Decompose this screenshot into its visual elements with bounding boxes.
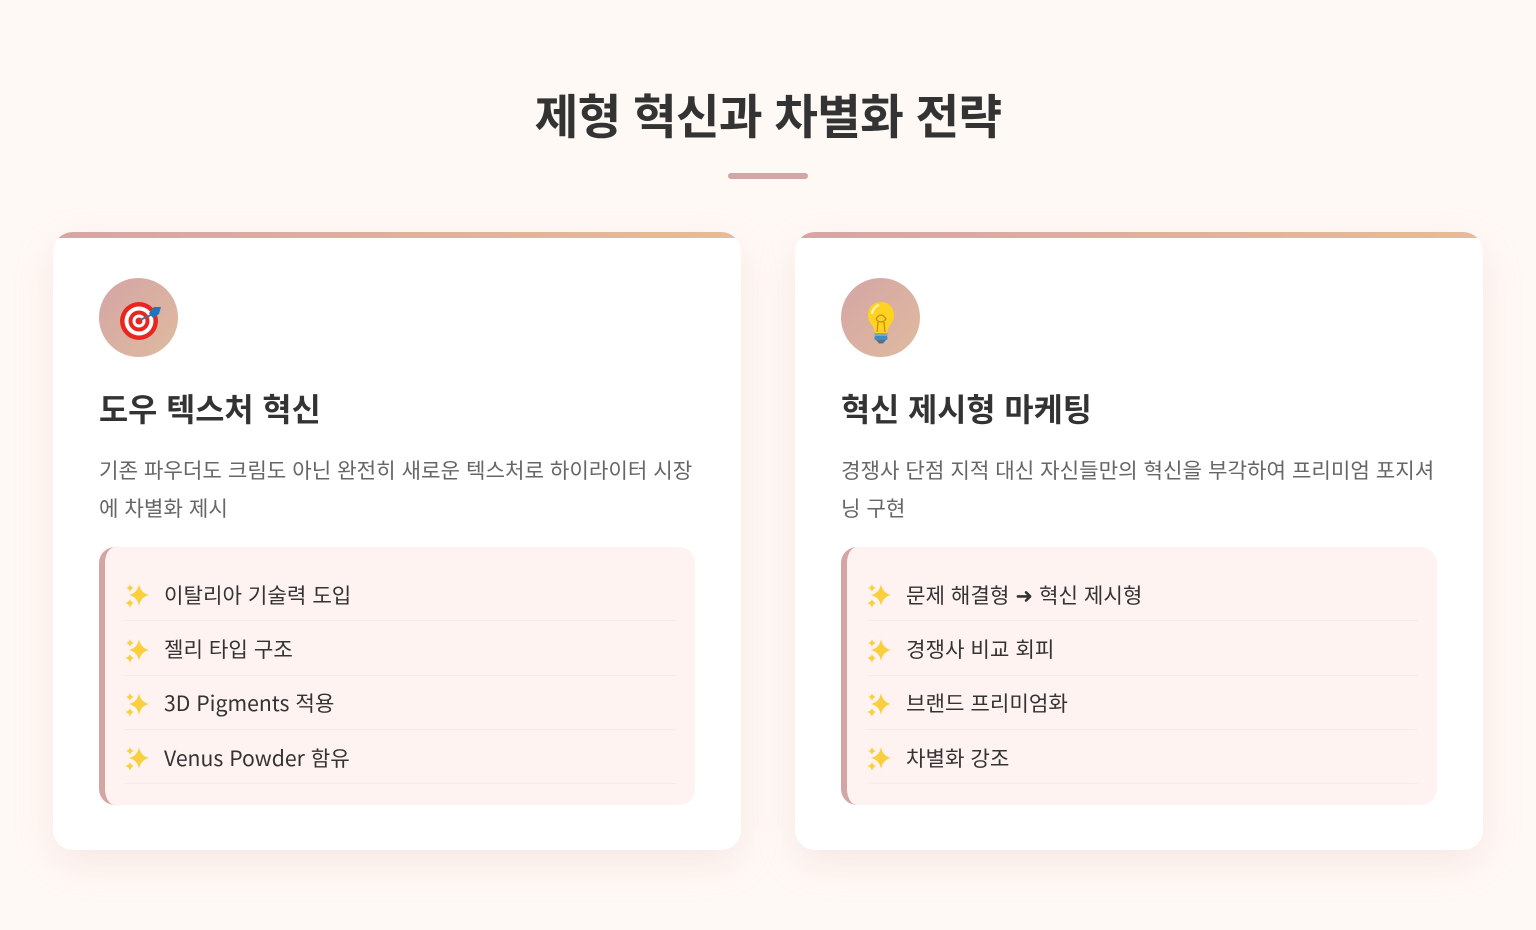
list item: 문제 해결형 ➜ 혁신 제시형 <box>906 579 1142 610</box>
list item: 경쟁사 비교 회피 <box>906 633 1054 664</box>
panel: innovation marketing <box>795 232 1483 850</box>
description <box>841 454 1434 523</box>
list item <box>125 621 676 676</box>
title underline <box>728 173 808 179</box>
description: 경쟁사 단점 지적 대신 자신들만의 혁신을 부각하여 프리미엄 포지셔 <box>841 454 1434 485</box>
icon: light bulb <box>841 278 920 357</box>
description: 에 차별화 제시 <box>99 492 228 523</box>
panel: texture innovation <box>53 232 741 850</box>
list item <box>867 675 1418 730</box>
list item: 젤리 타입 구조 <box>164 633 293 664</box>
heading: 혁신 제시형 마케팅 <box>841 385 1092 431</box>
description: 닝 구현 <box>841 492 905 523</box>
list item <box>125 675 676 730</box>
description: 기존 파우더도 크림도 아닌 완전히 새로운 텍스처로 하이라이터 시장 <box>99 454 692 485</box>
list item: 이탈리아 기술력 도입 <box>164 579 351 610</box>
list item <box>867 729 1418 784</box>
list item: 차별화 강조 <box>906 742 1009 773</box>
list item: 3D Pigments 적용 <box>164 687 334 718</box>
title: 제형 혁신과 차별화 전략 <box>535 79 1001 148</box>
feature list <box>99 547 695 805</box>
list item <box>125 566 676 621</box>
list item <box>867 621 1418 676</box>
feature list <box>841 547 1437 805</box>
list item: Venus Powder 함유 <box>164 742 350 773</box>
description <box>99 454 692 523</box>
list item <box>867 566 1418 621</box>
icon: target <box>99 278 178 357</box>
heading: 도우 텍스처 혁신 <box>99 385 321 431</box>
list item: 브랜드 프리미엄화 <box>906 687 1068 718</box>
list item <box>125 729 676 784</box>
